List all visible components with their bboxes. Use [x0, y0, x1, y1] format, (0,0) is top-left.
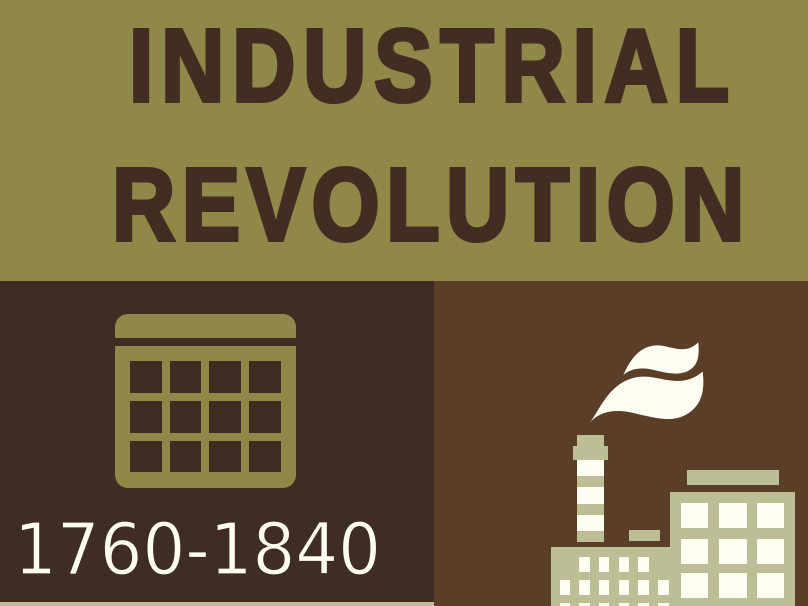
large windows	[681, 503, 784, 598]
date range text: 1760-1840	[14, 508, 381, 591]
icon: smoke	[590, 342, 703, 422]
panel: title banner	[0, 0, 808, 281]
icon: chimney	[573, 435, 608, 542]
title: line 1: INDUSTRIAL	[129, 8, 729, 124]
title: line 2: REVOLUTION	[112, 147, 744, 263]
panel: factory	[434, 281, 808, 606]
icon: calendar	[115, 314, 296, 488]
icon: factory building	[551, 470, 795, 606]
panel: dates	[0, 281, 434, 606]
small windows	[560, 557, 669, 606]
bottom strip	[0, 602, 434, 606]
